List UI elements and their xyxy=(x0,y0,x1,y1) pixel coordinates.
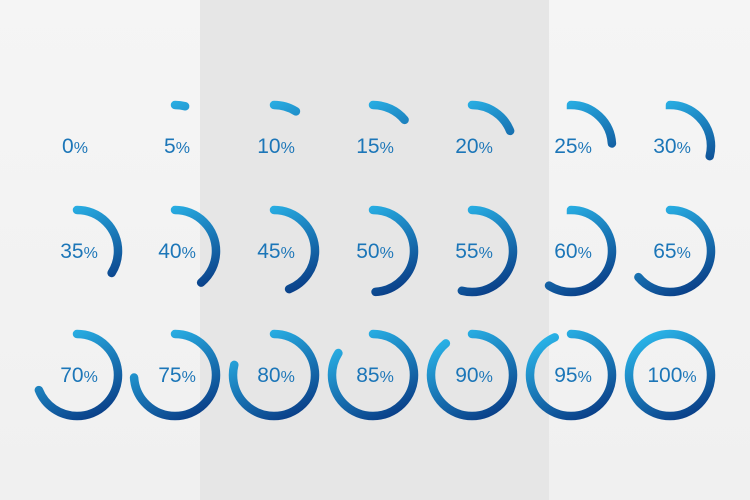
labels: 55% xyxy=(455,240,493,263)
labels xyxy=(60,135,697,387)
labels: 45% xyxy=(257,240,295,263)
labels: 100% xyxy=(647,364,697,387)
labels: 65% xyxy=(653,240,691,263)
labels: 5% xyxy=(164,135,190,158)
background band xyxy=(200,0,549,500)
row 1 indicators xyxy=(134,105,711,187)
labels: 50% xyxy=(356,240,394,263)
labels: 80% xyxy=(257,364,295,387)
labels: 90% xyxy=(455,364,493,387)
labels: 70% xyxy=(60,364,98,387)
row 3 indicators xyxy=(36,334,711,416)
labels: 0% xyxy=(62,135,88,158)
labels: 30% xyxy=(653,135,691,158)
labels: 25% xyxy=(554,135,592,158)
labels: 40% xyxy=(158,240,196,263)
labels: 35% xyxy=(60,240,98,263)
labels: 75% xyxy=(158,364,196,387)
row 2 indicators xyxy=(36,210,711,292)
labels: 10% xyxy=(257,135,295,158)
labels: 60% xyxy=(554,240,592,263)
labels: 15% xyxy=(356,135,394,158)
labels: 85% xyxy=(356,364,394,387)
labels: 20% xyxy=(455,135,493,158)
labels: 95% xyxy=(554,364,592,387)
